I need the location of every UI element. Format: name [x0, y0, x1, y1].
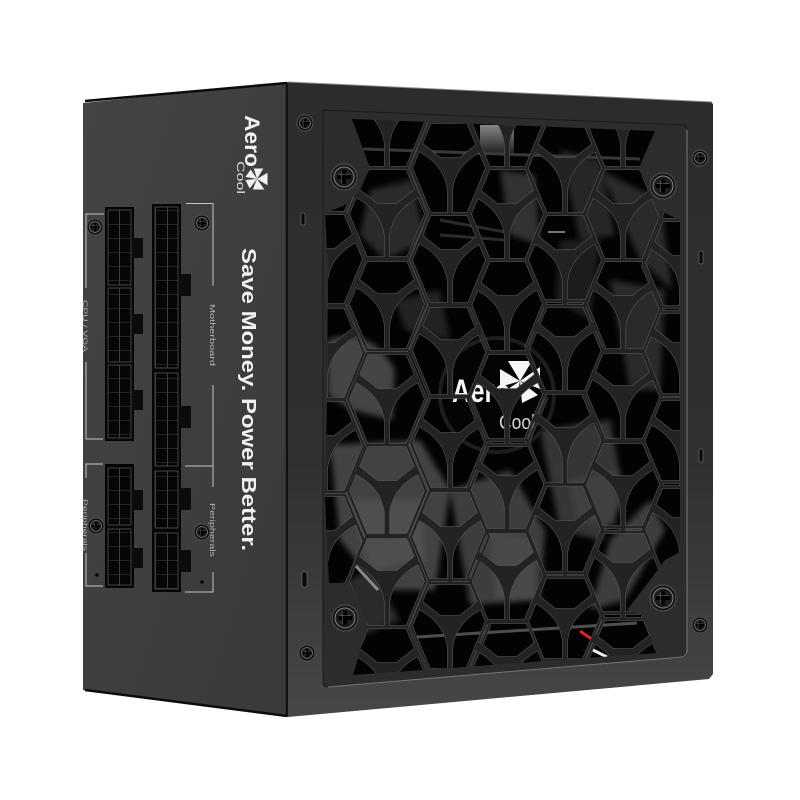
- mounting slots: [301, 213, 703, 587]
- fan hub with logo: [440, 338, 554, 452]
- fan hub with logo: Cool: [499, 412, 535, 434]
- label: CPU / VGA: CPU / VGA: [81, 300, 88, 353]
- label: Peripherals right: Peripherals: [208, 503, 215, 558]
- label: Peripherals left: Peripherals: [81, 499, 88, 552]
- front inner screws: [331, 164, 676, 631]
- bracket lines: [86, 204, 213, 592]
- side panel screws: [87, 215, 210, 584]
- side logo: AeroCool: Aero: [240, 115, 263, 167]
- honeycomb grille: [325, 120, 680, 674]
- side logo: AeroCool: Cool: [234, 161, 246, 194]
- label: Motherboard: Motherboard: [208, 304, 215, 366]
- connectors: motherboard and peripherals column: [152, 204, 191, 592]
- side panel: [81, 82, 288, 717]
- PCB and wires behind fan: [355, 125, 640, 657]
- inner frame: [323, 110, 687, 687]
- side logo: AeroCool: [234, 115, 268, 194]
- fan hub with logo: Aero: [452, 373, 510, 409]
- front panel: [286, 76, 721, 762]
- slogan: Save Money. Power Better.: [237, 248, 259, 551]
- fan blades: [328, 150, 672, 640]
- connectors: CPU / VGA and peripherals column: [105, 207, 143, 588]
- front outer screws: [297, 115, 708, 661]
- grille opening with fan: [325, 119, 680, 675]
